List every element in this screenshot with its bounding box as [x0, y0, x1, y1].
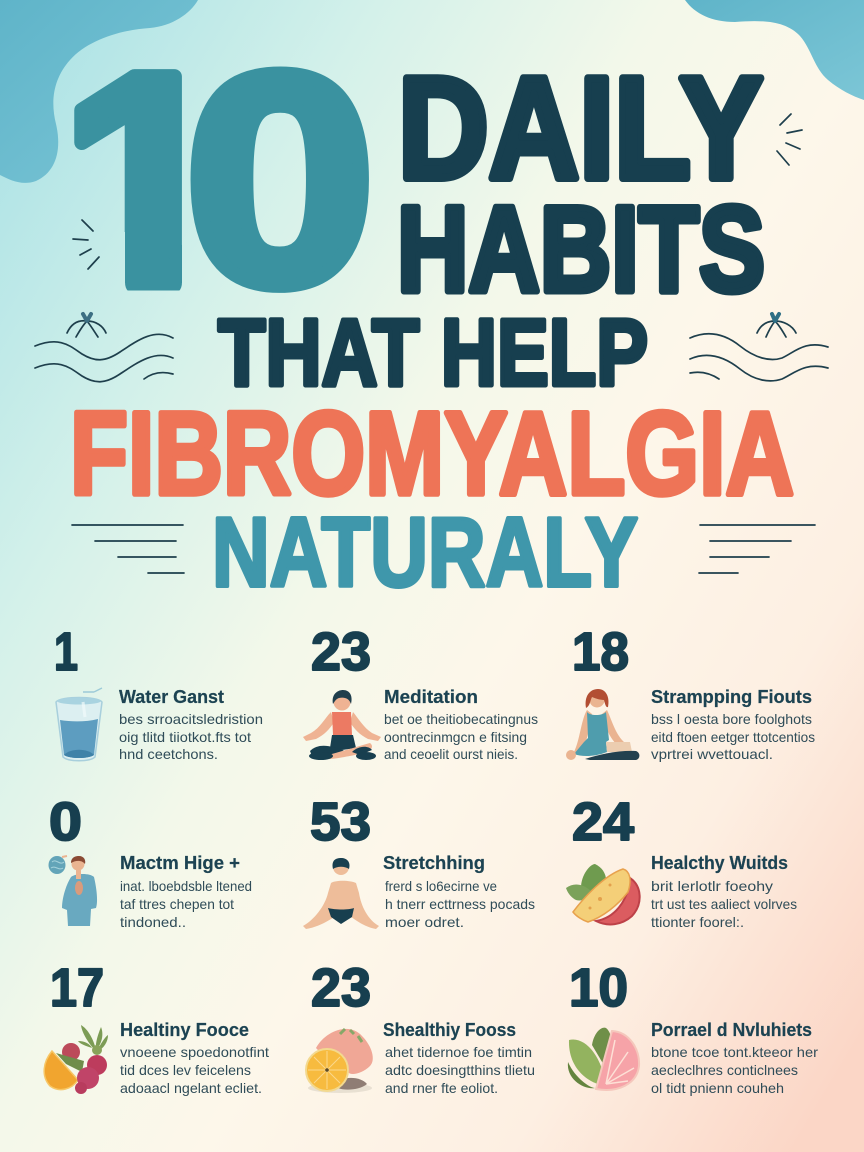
- number: 23: [311, 958, 371, 1018]
- habit description: [651, 878, 797, 930]
- title line: habits: HABITS: [397, 181, 765, 317]
- habit description: [120, 1044, 269, 1096]
- habit description: bss l oesta bore foolghots: [651, 711, 812, 727]
- habit description: hnd ceetchons.: [119, 746, 218, 762]
- habit description: taf ttres chepen tot: [120, 896, 234, 912]
- habit description: moer odret.: [385, 914, 464, 930]
- habit title: Mactm Hige +: [120, 853, 240, 873]
- habit description: [119, 711, 263, 762]
- habit 8: [306, 958, 535, 1096]
- icon: water glass: [56, 688, 102, 761]
- habit description: [651, 711, 815, 762]
- decoration: left waves and insect: [35, 314, 173, 382]
- icon: fruit and leaves: [44, 1025, 108, 1094]
- habit description: and ceoelit ourst nieis.: [384, 746, 518, 762]
- habit description: oig tlitd tiiotkot.fts tot: [119, 729, 251, 745]
- habit 2: [303, 622, 538, 762]
- habit description: ahet tidernoe foe timtin: [385, 1044, 532, 1060]
- habit description: aecleclhres conticlnees: [651, 1062, 798, 1078]
- icon: stretching figure: [303, 858, 379, 929]
- icon: person with brain bubble: [48, 856, 97, 926]
- decoration: right waves and insect: [690, 314, 828, 381]
- habit description: [120, 878, 252, 930]
- habit title: Shealthiy Fooss: [383, 1020, 516, 1040]
- number: 18: [572, 622, 629, 682]
- habit description: adtc doesingtthins tlietu: [385, 1062, 535, 1078]
- habit description: h tnerr ecttrness pocads: [385, 896, 535, 912]
- habit description: frerd s lo6ecirne ve: [385, 878, 497, 894]
- title number 10: 0: [185, 11, 375, 347]
- habit 9: [568, 958, 818, 1096]
- title line: daily: DAILY: [398, 47, 763, 209]
- habit description: oontrecinmgcn e fitsing: [384, 729, 527, 745]
- icon: seated woman: [566, 689, 639, 760]
- number: 0: [49, 792, 82, 852]
- habit title: Porrael d Nvluhiets: [651, 1020, 812, 1040]
- habit description: [385, 878, 535, 930]
- habit 4: [48, 792, 252, 930]
- habit description: inat. lboebdsble ltened: [120, 878, 252, 894]
- icon: meditation figure: [303, 690, 381, 760]
- habit description: eitd ftoen eetger ttotcentios: [651, 729, 815, 745]
- habit 6: [566, 792, 797, 930]
- habit description: vnoeene spoedonotfint: [120, 1044, 269, 1060]
- icon: food slices and leaf: [566, 864, 640, 924]
- habit description: ttionter foorel:.: [651, 914, 744, 930]
- number: 23: [311, 622, 371, 682]
- habit 5: [303, 792, 535, 930]
- decoration: left speed lines: [72, 525, 184, 573]
- habit 3: [566, 622, 815, 762]
- background blob: top left: [0, 0, 198, 183]
- number: 17: [50, 958, 104, 1018]
- habit description: trt ust tes aaliect volrves: [651, 896, 797, 912]
- icon: leaves and grapefruit: [568, 1028, 639, 1090]
- number: 24: [572, 792, 634, 852]
- background blob: top right: [685, 0, 864, 100]
- habit title: Water Ganst: [119, 687, 224, 707]
- habit title: Healtiny Fooce: [120, 1020, 249, 1040]
- habit description: tindoned..: [120, 914, 186, 930]
- number: 1: [54, 622, 78, 682]
- habit description: ol tidt pnienn couheh: [651, 1080, 784, 1096]
- title number 10: [74, 66, 369, 293]
- habit description: [384, 711, 538, 762]
- habit description: brit lerlotlr foeohy: [651, 878, 773, 894]
- title line: that help: THAT HELP: [218, 300, 648, 406]
- habit description: tid dces lev feicelens: [120, 1062, 251, 1078]
- habit description: adoaacl ngelant ecliet.: [120, 1080, 262, 1096]
- title number 10: 1: [61, 11, 231, 347]
- habit description: vprtrei wvettouacl.: [651, 746, 773, 762]
- title line: naturaly: NATURALY: [212, 497, 638, 607]
- number: 10: [569, 958, 628, 1018]
- decoration: right speed lines: [699, 525, 815, 573]
- habit title: Stretchhing: [383, 853, 485, 873]
- number: 53: [310, 792, 371, 852]
- habit description: [651, 1044, 818, 1096]
- habit title: Healcthy Wuitds: [651, 853, 788, 873]
- decoration: right sparkle lines: [777, 114, 802, 165]
- habit 7: [44, 958, 269, 1096]
- habit description: [385, 1044, 535, 1096]
- decoration: left sparkle lines: [73, 220, 99, 269]
- habit 1: [54, 622, 263, 762]
- habit description: btone tcoe tont.kteeor her: [651, 1044, 818, 1060]
- icon: citrus and salmon: [306, 1029, 373, 1093]
- habit title: Meditation: [384, 687, 478, 707]
- title: [74, 66, 794, 589]
- habit title: Strampping Fiouts: [651, 687, 812, 707]
- habit description: and rner fte eoliot.: [385, 1080, 498, 1096]
- habit description: bet oe theitiobecatingnus: [384, 711, 538, 727]
- habit description: bes srroacitsledristion: [119, 711, 263, 727]
